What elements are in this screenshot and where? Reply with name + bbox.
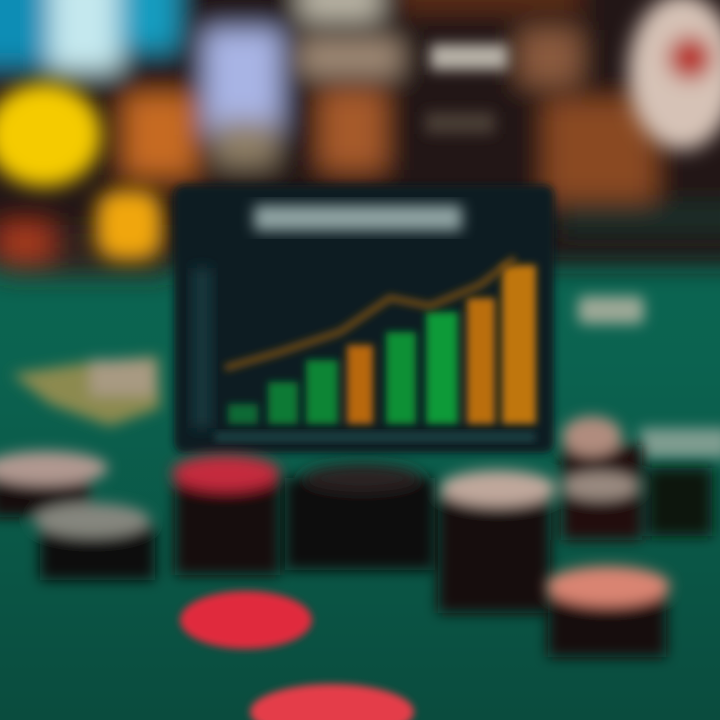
panel: dark chart screen bbox=[174, 185, 554, 453]
chart axis: baseline band bbox=[215, 432, 535, 442]
background: blurred room strip bbox=[0, 0, 720, 275]
panel: cards on right of felt bbox=[578, 296, 720, 458]
chip stack: centre dark bbox=[285, 464, 435, 570]
chip stack: right tall bbox=[438, 416, 712, 613]
line chart: orange trend line bbox=[225, 258, 515, 368]
chip stack: front right bbox=[546, 566, 670, 657]
chip: flat red centre bbox=[180, 591, 312, 649]
chip stack: centre red bbox=[172, 455, 280, 575]
chip stack: left bbox=[0, 451, 155, 580]
dark signage blocks in background bbox=[425, 44, 508, 134]
icon: yellow balloon shape, upper left bbox=[0, 83, 162, 260]
chart heading: blurred title bbox=[254, 205, 462, 231]
chip: flat red bottom bbox=[250, 684, 414, 720]
bar chart: green and orange bars bbox=[228, 265, 536, 424]
panel: playing cards on left of felt bbox=[12, 356, 160, 426]
icon: pale round card, upper right bbox=[628, 0, 720, 150]
panel: stacks of poker chips bbox=[0, 416, 712, 720]
chart axis: vertical label bbox=[192, 268, 212, 428]
